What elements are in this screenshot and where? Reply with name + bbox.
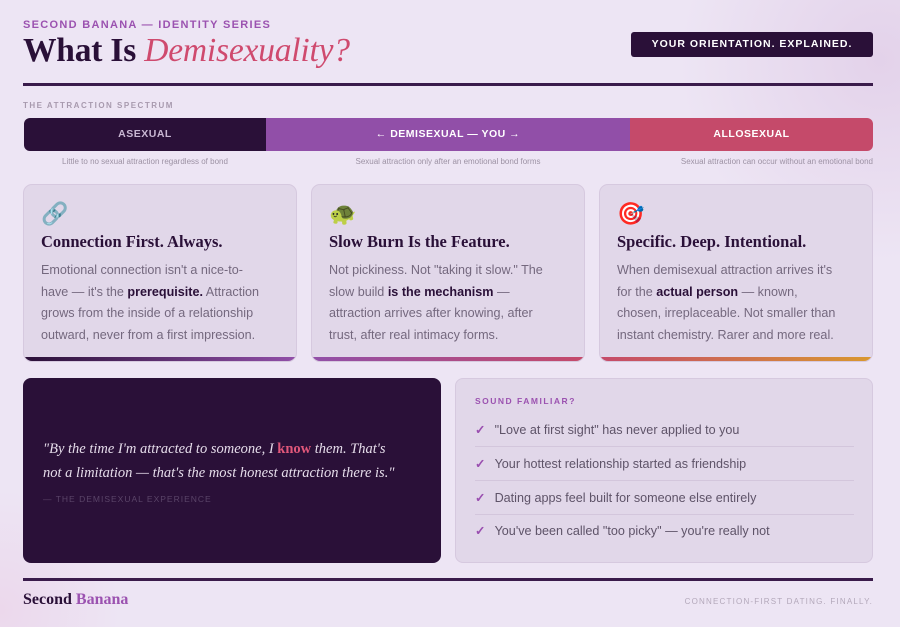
segment: allosexual: ALLOSEXUAL: [713, 128, 790, 140]
badge: YOUR ORIENTATION. EXPLAINED.: [652, 38, 852, 50]
card: slow burn: Not pickiness. Not "taking it slow." The slow build is the mechanism — attraction arrives after knowing, after trust, after real intimacy forms.: [329, 263, 543, 342]
spectrum captions: Sexual attraction can occur without an emotional bond: [681, 157, 873, 166]
item 3: ✓ Dating apps feel built for someone else entirely: [475, 491, 756, 505]
quote text: "By the time I'm attracted to someone, I know them. That's: [43, 441, 386, 457]
spectrum captions: [62, 157, 873, 166]
item 2: [475, 448, 854, 481]
card: specific: When demisexual attraction arrives it's for the actual person — known, chosen, irreplaceable. Not smaller than instant chemistry. Rarer and more real.: [617, 263, 835, 342]
spectrum bar: [24, 118, 873, 151]
footer tagline: CONNECTION-FIRST DATING. FINALLY.: [685, 597, 873, 606]
item 1: [475, 414, 854, 447]
card: connection: Connection First. Always.: [41, 232, 222, 251]
badge: [631, 32, 873, 57]
card: slow burn: [311, 184, 585, 362]
quote text: [43, 441, 394, 481]
segment: demisexual: [266, 118, 630, 151]
spectrum captions: Sexual attraction only after an emotional bond forms: [356, 157, 540, 166]
card: connection: Emotional connection isn't a nice-to-have — it's the prerequisite. Attraction grows from the inside of a relationship outward, never from a first impression.: [41, 263, 259, 342]
segment: asexual: [24, 118, 266, 151]
spectrum captions: Little to no sexual attraction regardless of bond: [62, 157, 228, 166]
item 1: ✓ "Love at first sight" has never applied to you: [475, 423, 739, 437]
kicker: SECOND BANANA — IDENTITY SERIES: [23, 19, 271, 31]
footer brand: Second Banana: [23, 591, 128, 608]
quote text: not a limitation — that's the most honest attraction there is.": [43, 465, 394, 481]
title: What Is Demisexuality?: [23, 32, 350, 69]
card: specific: Specific. Deep. Intentional.: [617, 232, 806, 251]
segment: asexual: ASEXUAL: [118, 128, 172, 140]
icon: link: 🔗: [41, 201, 68, 226]
item 4: ✓ You've been called "too picky" — you're really not: [475, 524, 770, 538]
icon: target: 🎯: [617, 201, 644, 226]
checklist heading: SOUND FAMILIAR?: [475, 396, 576, 406]
segment: demisexual: ← DEMISEXUAL — YOU →: [376, 128, 520, 140]
attribution: — THE DEMISEXUAL EXPERIENCE: [43, 494, 212, 504]
item 2: ✓ Your hottest relationship started as friendship: [475, 457, 746, 471]
segment: allosexual: [630, 118, 873, 151]
spectrum label: THE ATTRACTION SPECTRUM: [23, 101, 174, 110]
quote panel: [23, 378, 441, 563]
card: specific: [599, 184, 873, 362]
card: slow burn: Slow Burn Is the Feature.: [329, 232, 510, 251]
checklist panel: [455, 378, 873, 563]
icon: turtle: 🐢: [329, 201, 356, 226]
card: connection: [23, 184, 297, 362]
item 3: [475, 482, 854, 515]
